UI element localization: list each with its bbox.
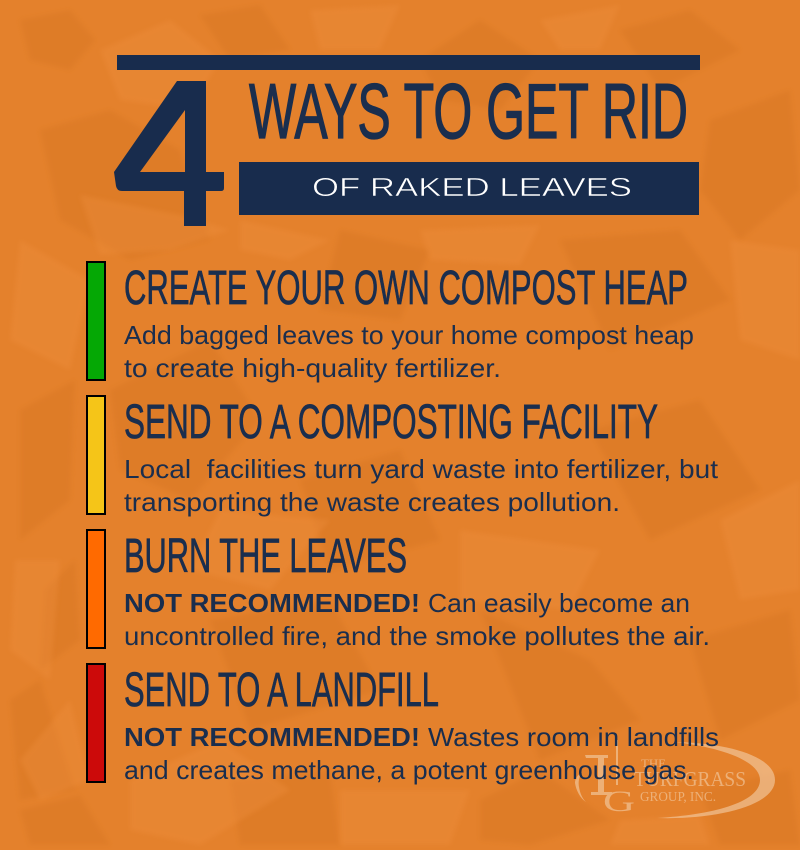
item 3: burn the leaves: uncontrolled fire, and the smoke pollutes the air. (124, 621, 710, 651)
item 4: landfill: and creates methane, a potent greenhouse gas. (124, 755, 694, 785)
top rule (117, 55, 700, 70)
subtitle banner: OF RAKED LEAVES (312, 172, 632, 202)
item 2: composting facility: transporting the waste creates pollution. (124, 487, 620, 517)
item 3: burn the leaves: BURN THE LEAVES (124, 530, 407, 583)
item 3: burn the leaves (87, 530, 710, 651)
logo: The Turfgrass Group, Inc.: GROUP, INC. (640, 790, 716, 805)
item 3: burn the leaves: NOT RECOMMENDED! (124, 588, 420, 618)
logo: The Turfgrass Group, Inc.: G (603, 785, 635, 818)
subtitle banner (239, 162, 699, 215)
large numeral 4 (114, 81, 224, 226)
item 1: compost heap: Add bagged leaves to your home compost heap (124, 320, 694, 350)
logo: The Turfgrass Group, Inc.: TURFGRASS (634, 767, 746, 791)
item 4: landfill (87, 664, 719, 785)
item 2: composting facility: Local facilities turn yard waste into fertilizer, but (124, 454, 719, 484)
item 4: landfill: NOT RECOMMENDED! (124, 722, 420, 752)
item 4: landfill: Wastes room in landfills (428, 722, 719, 752)
item 2: composting facility (87, 396, 719, 517)
logo: The Turfgrass Group, Inc. (575, 740, 775, 818)
logo: The Turfgrass Group, Inc.: THE (641, 756, 666, 770)
item 4: landfill: SEND TO A LANDFILL (124, 664, 439, 717)
item 3: burn the leaves: Can easily become an (428, 588, 690, 618)
item 1: compost heap: to create high-quality fertilizer. (124, 353, 501, 383)
item 1: compost heap (87, 262, 694, 383)
